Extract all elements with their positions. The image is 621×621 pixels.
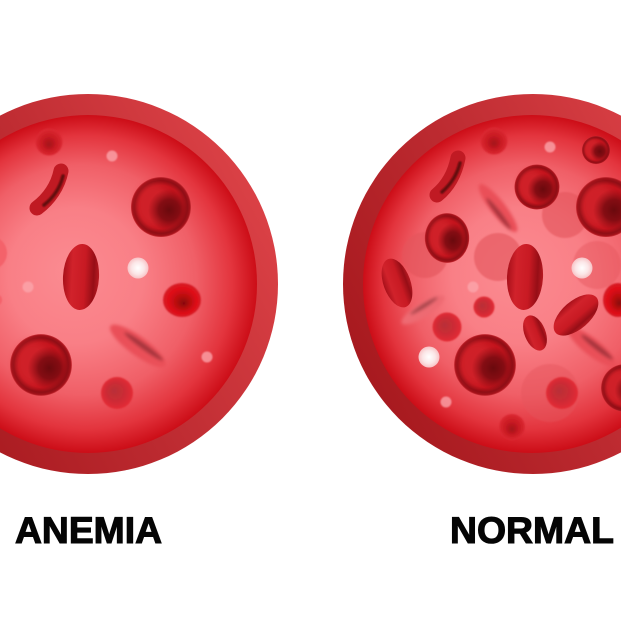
vessel rim: normal <box>343 94 621 474</box>
cell: blurred sickle <box>105 318 171 374</box>
panel: anemia blood sample <box>0 94 278 474</box>
vessel interior: anemia <box>0 115 257 453</box>
platelet: white upper <box>572 258 592 278</box>
cell: large right edge <box>601 364 621 412</box>
cell: pale left <box>432 312 462 342</box>
vessel interior: normal <box>363 115 621 453</box>
platelet: white <box>128 258 148 278</box>
cell: large upper right <box>131 177 191 237</box>
cell: large centre bottom <box>454 334 516 396</box>
cell: elongated centre <box>505 243 545 311</box>
cell: bright red right edge <box>603 283 621 317</box>
cell: small lower <box>101 377 133 409</box>
cell: blurred sickle lower right <box>563 322 621 372</box>
blurred cells: anemia left edge <box>0 236 7 306</box>
cell: small top right <box>582 136 610 164</box>
panel: normal blood sample <box>343 94 621 474</box>
cell: small top <box>36 128 62 156</box>
platelet: pale dot top <box>544 142 556 152</box>
cell: large lower left <box>10 334 72 396</box>
cell: upper centre <box>514 164 560 210</box>
cell: blurred sickle upper <box>474 180 522 236</box>
heading: normal: NORMAL <box>450 510 614 551</box>
cell: small oval <box>518 312 552 354</box>
cell: sickle <box>437 158 460 195</box>
ghost cells: out of focus background <box>402 192 621 422</box>
cell: bright red small <box>163 283 201 317</box>
cell: elongated centre <box>61 243 101 311</box>
platelet: pale dot centre <box>468 282 478 292</box>
cell: oval left <box>376 254 418 312</box>
cell: small bottom <box>499 414 525 440</box>
platelet: pale dot left <box>22 282 34 292</box>
vessel rim: anemia <box>0 94 278 474</box>
cell: blurred sickle left <box>398 291 448 329</box>
cell: pale lower right <box>546 377 578 409</box>
platelet: pale dot <box>106 150 118 162</box>
cell: small centre <box>474 296 494 318</box>
platelet: white lower <box>418 346 440 368</box>
cell: left <box>425 213 469 263</box>
heading: anemia: ANEMIA <box>15 510 162 551</box>
platelet: pale dot lower <box>440 396 452 408</box>
platelet: pale dot right <box>202 352 212 362</box>
cell: large right <box>576 177 621 237</box>
cell: oval right <box>546 287 606 343</box>
cell: small top <box>480 128 508 154</box>
cell: sickle <box>37 171 63 208</box>
